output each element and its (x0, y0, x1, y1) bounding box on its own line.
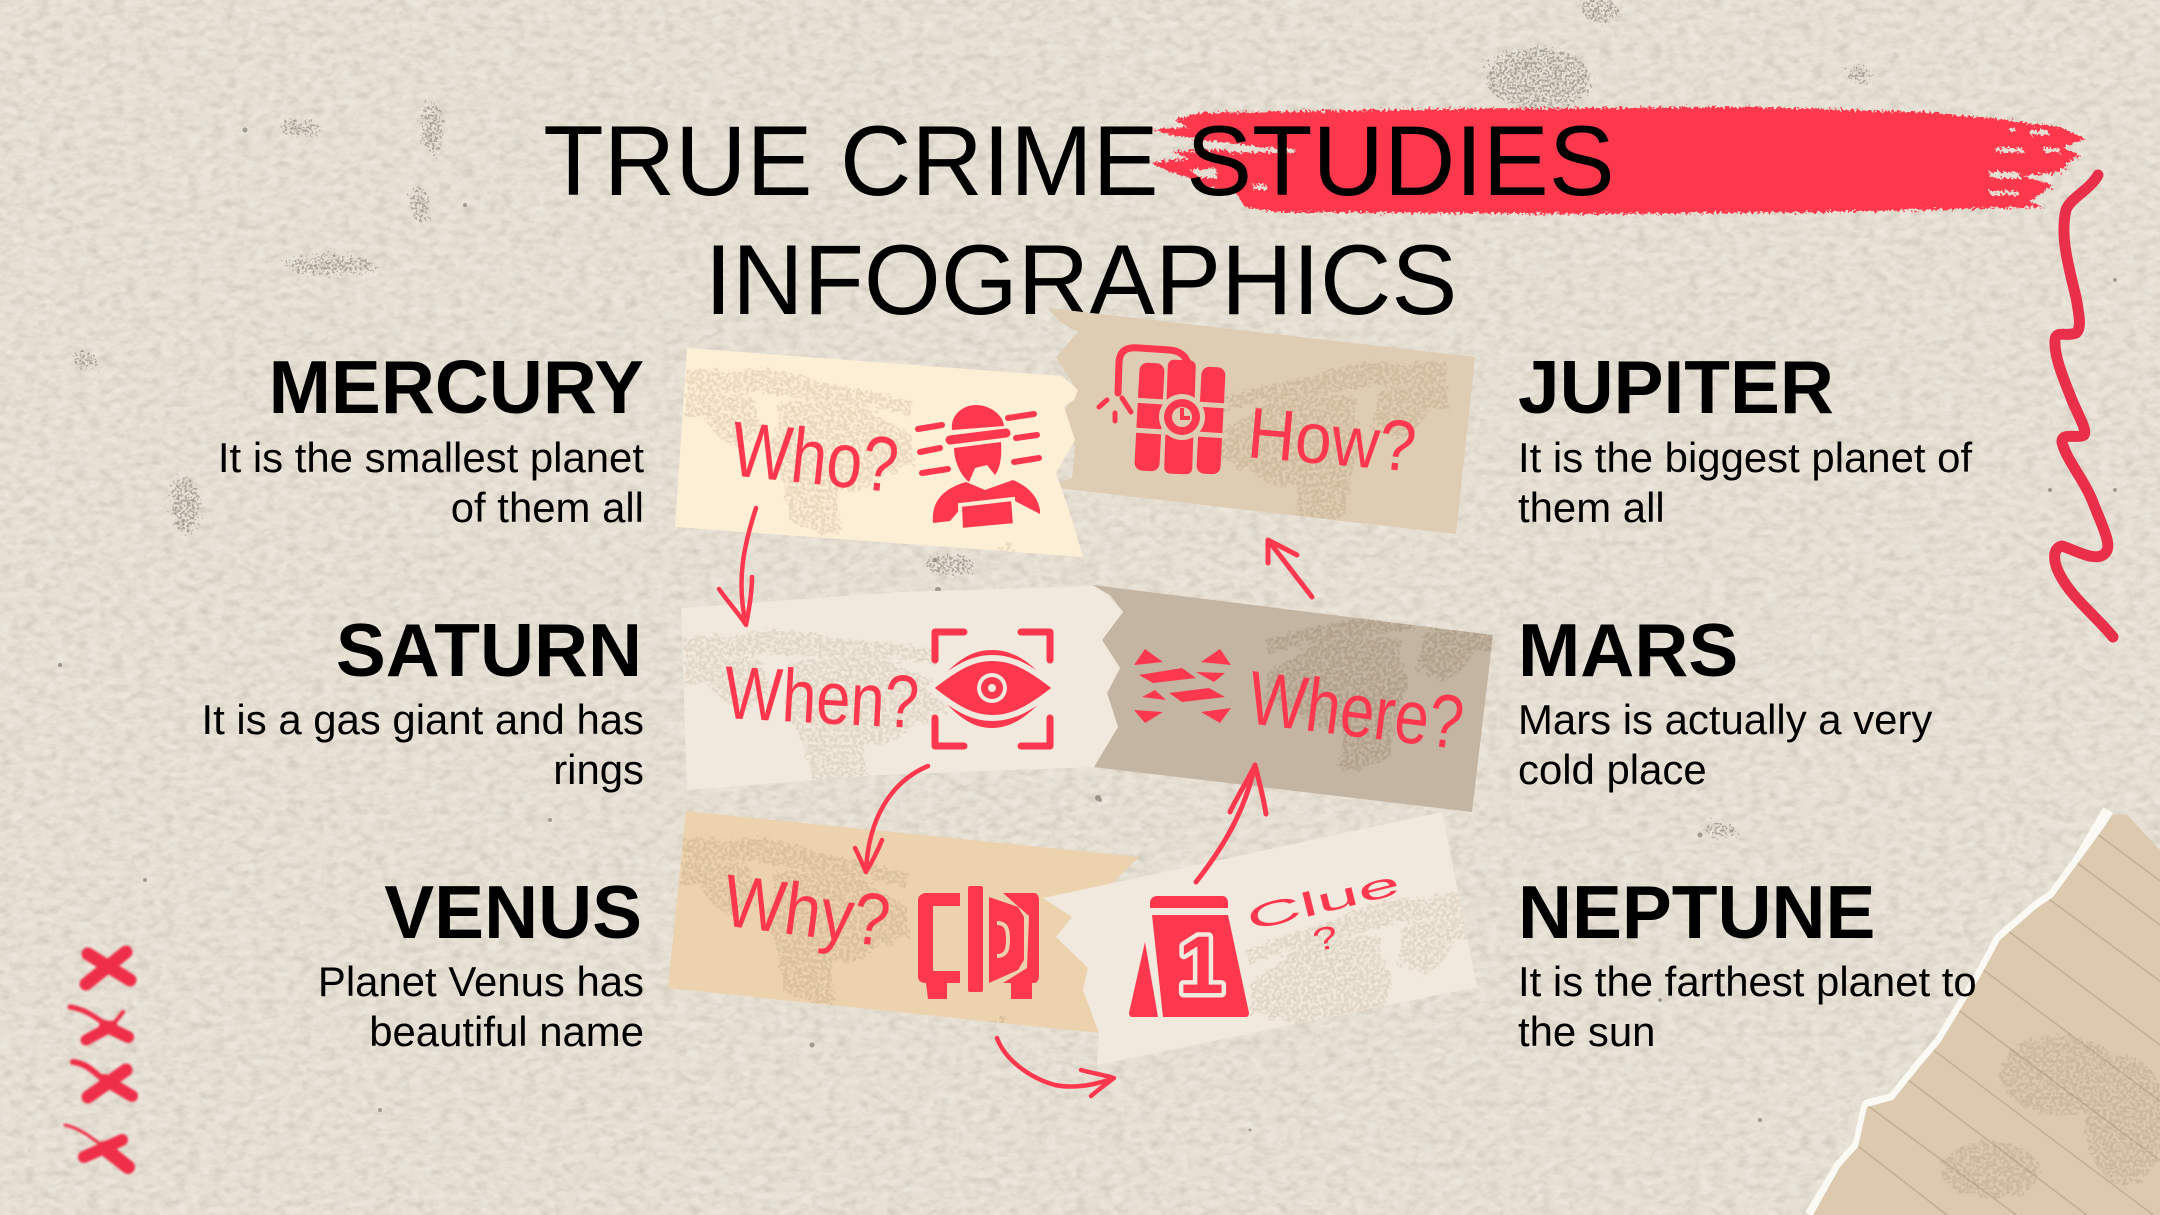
block: jupiter (1518, 345, 1972, 531)
block: neptune: NEPTUNE (1518, 870, 1875, 954)
block: mercury (218, 345, 644, 531)
panel: when tape (681, 586, 1123, 797)
text: Who?: Who? (727, 405, 902, 510)
icon: open safe (918, 886, 1039, 999)
title (543, 105, 1615, 335)
icon: evidence marker 1: 1 (1178, 920, 1224, 1011)
text: Why?: Why? (719, 859, 895, 963)
block: saturn (202, 608, 644, 793)
block: mercury: It is the smallest planet (218, 434, 644, 481)
panel: where tape (1093, 585, 1506, 812)
arrow: when to why (855, 766, 928, 872)
block: jupiter: them all (1518, 484, 1665, 531)
x mark 1 (86, 952, 130, 984)
red brush stroke behind title (1151, 107, 2086, 214)
block: venus: beautiful name (369, 1008, 644, 1055)
text: How?: How? (1245, 393, 1419, 487)
icon: police tape (1134, 649, 1231, 723)
block: neptune (1518, 870, 1977, 1055)
text: Clue?: ? (1309, 919, 1342, 959)
block: mars (1518, 608, 1932, 793)
title: TRUE CRIME STUDIES (543, 105, 1615, 216)
arrow: who to when (719, 508, 756, 625)
block: neptune: It is the farthest planet to (1518, 958, 1977, 1005)
block: mercury: MERCURY (269, 345, 644, 429)
x mark 2 (70, 1007, 128, 1040)
icon: eye in focus frame (930, 632, 1056, 746)
block: jupiter: JUPITER (1518, 345, 1834, 429)
red squiggle line (2055, 175, 2113, 637)
block: mercury: of them all (451, 484, 644, 531)
arrow: where to how (1268, 540, 1312, 597)
block: saturn: rings (553, 746, 644, 793)
block: venus: VENUS (384, 870, 642, 954)
panel: how tape (1048, 308, 1475, 556)
block: venus: Planet Venus has (318, 958, 644, 1005)
icon: masked suspect (918, 405, 1040, 530)
arrow: why to clue (997, 1038, 1114, 1096)
panel: who tape (674, 348, 1083, 559)
block: mars: Mars is actually a very (1518, 696, 1932, 743)
block: neptune: the sun (1518, 1008, 1655, 1055)
text: Clue?: Clue (1243, 864, 1404, 938)
torn notebook paper corner (1810, 810, 2160, 1215)
panel: clue tape (1043, 812, 1476, 1065)
block: venus (318, 870, 644, 1055)
block: mars: MARS (1518, 608, 1738, 692)
panel: why tape (668, 811, 1139, 1033)
block: saturn: SATURN (336, 608, 642, 692)
x mark 3 (73, 1062, 132, 1097)
block: mars: cold place (1518, 746, 1707, 793)
text: Where?: Where? (1244, 654, 1468, 766)
red x marks (65, 952, 132, 1167)
block: saturn: It is a gas giant and has (202, 696, 644, 743)
x mark 4 (65, 1125, 128, 1167)
icon: evidence marker 1 (1129, 896, 1249, 1017)
title: INFOGRAPHICS (705, 224, 1457, 335)
icon: dynamite (1099, 348, 1228, 475)
text: When?: When? (722, 650, 921, 745)
arrow: clue to where (1196, 765, 1266, 882)
block: jupiter: It is the biggest planet of (1518, 434, 1972, 481)
